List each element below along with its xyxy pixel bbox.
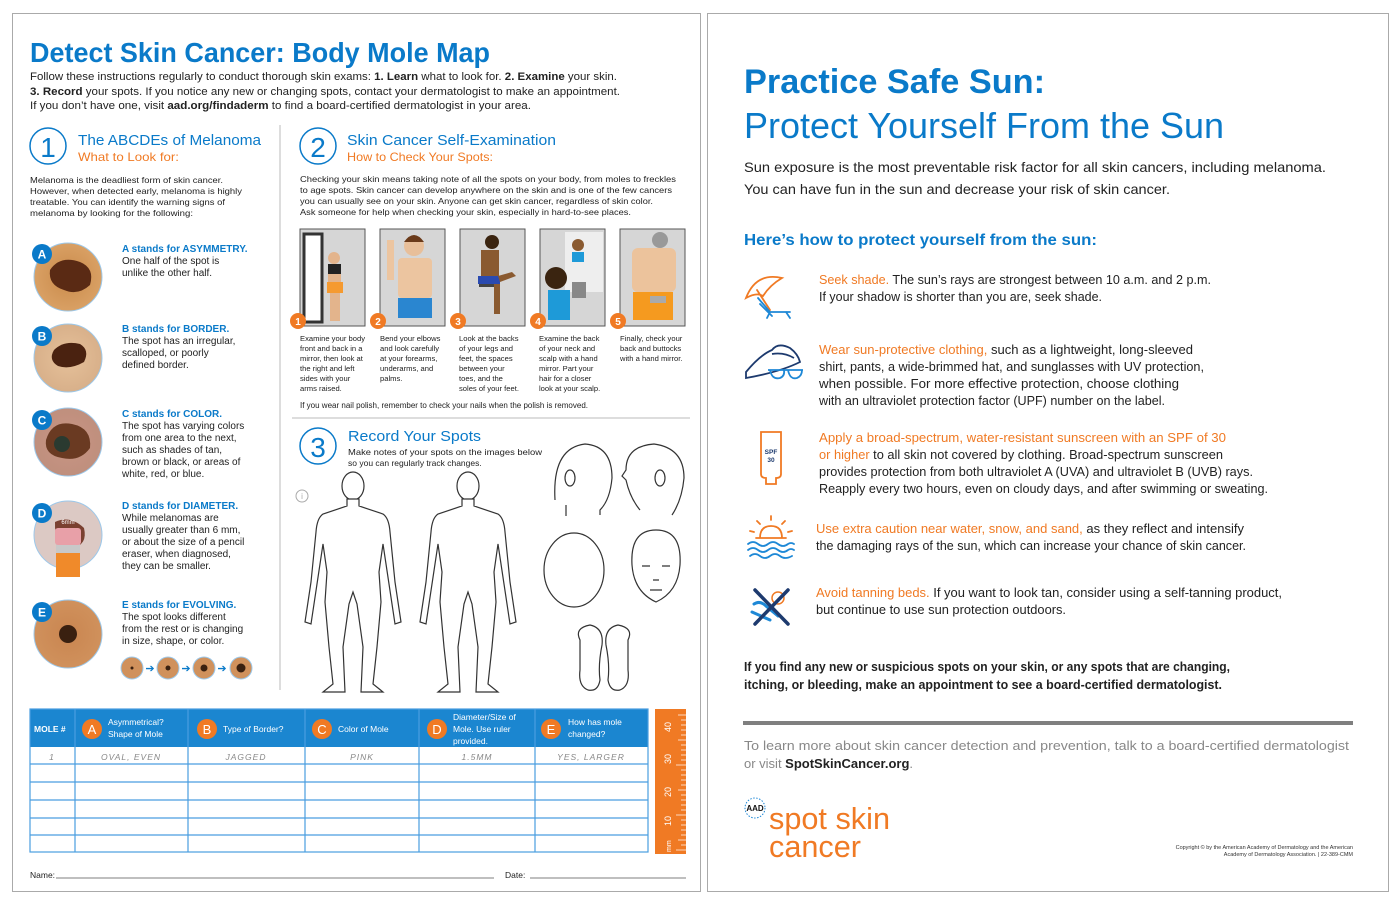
right intro: You can have fun in the sun and decrease your risk of skin cancer. [744,181,1170,197]
tip: clothing: shirt, pants, a wide-brimmed hat, and sunglasses with UV protection, [819,360,1204,374]
tip: clothing: with an ultraviolet protection factor (UPF) number on the label. [818,394,1165,408]
text C: white, red, or blue. [121,469,204,480]
learn more text: or visit SpotSkinCancer.org. [744,756,913,771]
right title: Protect Yourself From the Sun [744,105,1224,146]
page border: right [708,14,1388,892]
info icon [296,490,308,502]
text E: E stands for EVOLVING. [122,600,236,611]
logo: AAD spot skin cancer: cancer [769,829,861,864]
table example row: YES, LARGER [557,752,625,762]
table example row: PINK [350,752,374,762]
table header: A [88,722,97,737]
text B: scalloped, or poorly [122,348,209,359]
mole D: 6mm [61,520,75,526]
text C: C stands for COLOR. [122,409,222,420]
ruler [655,709,686,854]
table header: Mole. Use ruler [453,724,511,734]
text E: from the rest or is changing [122,624,243,635]
step captions: arms raised. [300,384,342,393]
step captions: Look at the backs [459,334,519,343]
section 1 heading: 1 [40,132,56,163]
body diagram front [305,472,401,692]
table header: E [547,722,556,737]
tip: tanning beds: Avoid tanning beds. If you want to look tan, consider using a self-tanning product, [816,586,1282,600]
tip: tanning beds: but continue to use sun protection outdoors. [816,603,1066,617]
mole E: E [38,606,46,620]
table example row [49,752,625,762]
table header: C [317,722,327,737]
section 3 heading: Make notes of your spots on the images below [348,447,543,457]
tip: sunscreen: Apply a broad-spectrum, water-resistant sunscreen with an SPF of 30 [819,431,1226,445]
step captions: of your legs and [459,344,513,353]
name and date lines [30,870,686,880]
section 2 heading: 2 [310,132,326,163]
step captions: and look carefully [380,344,439,353]
step 2 photo: 2 [375,317,381,328]
intro text: If you don’t have one, visit aad.org/findaderm to find a board-certified dermatologist in your area. [30,100,531,112]
section 1 heading: What to Look for: [78,150,179,164]
text D: usually greater than 6 mm, [122,525,240,536]
mole A [32,243,102,311]
text A [122,244,248,279]
ruler: mm [666,840,673,852]
copyright: Copyright © by the American Academy of Dermatology and the American [1176,844,1353,851]
table example row: 1 [49,752,55,762]
step captions: look at your scalp. [539,384,600,393]
step captions: of your neck and [539,344,595,353]
mole tracking table [30,709,648,852]
tip: clothing: Wear sun-protective clothing, such as a lightweight, long-sleeved [819,343,1193,357]
head diagrams [544,444,684,607]
table header: Color of Mole [338,724,389,734]
feet diagram [578,625,630,690]
mole E [32,600,102,668]
step captions: feet, the spaces [459,354,513,363]
tip: sunscreen: or higher to all skin not covered by clothing. Broad-spectrum sunscreen [819,448,1223,462]
table header: provided. [453,736,488,746]
evolving sequence: ➔ [181,663,191,675]
ruler: 20 [663,787,673,797]
tip: seek shade: Seek shade. The sun’s rays are strongest between 10 a.m. and 2 p.m. [819,273,1211,287]
tip: seek shade: If your shadow is shorter than you are, seek shade. [819,290,1102,304]
step 4 photo [530,229,605,329]
step captions: soles of your feet. [459,384,519,393]
section 3 heading: 3 [310,432,326,463]
text D: eraser, when diagnosed, [122,549,231,560]
text B: defined border. [122,360,189,371]
step captions: hair for a closer [539,374,592,383]
icon: hat and sunglasses [746,345,803,378]
right intro: Sun exposure is the most preventable risk factor for all skin cancers, including melanoma. [744,159,1326,175]
step captions: mirror, then look at [300,354,364,363]
step captions: back and buttocks [620,344,681,353]
icon: no tanning beds [752,590,788,624]
nail polish note: If you wear nail polish, remember to check your nails when the polish is removed. [300,401,588,410]
text A: unlike the other half. [122,268,212,279]
tip: sunscreen [819,431,1268,496]
text D: While melanomas are [122,513,219,524]
tip: clothing [818,343,1204,408]
text D: D stands for DIAMETER. [122,501,238,512]
text E: The spot looks different [122,612,226,623]
logo: AAD spot skin cancer [745,798,890,864]
step 3 photo: 3 [455,317,461,328]
section 3 heading: so you can regularly track changes. [348,458,482,468]
learn more text: To learn more about skin cancer detection and prevention, talk to a board-certified dermatologist [744,738,1349,753]
section 1 intro: However, when detected early, melanoma is highly [30,186,243,196]
icon: umbrella and chair [746,277,790,318]
section 1 intro: Melanoma is the deadliest form of skin cancer. [30,175,223,185]
table example row: OVAL, EVEN [101,752,161,762]
table header: Type of Border? [223,724,284,734]
text C: from one area to the next, [122,433,237,444]
step captions: at your forearms, [380,354,437,363]
step captions: sides with your [300,374,351,383]
info icon: i [301,492,303,501]
mole A: A [38,248,47,262]
intro text [30,71,620,112]
right intro [744,159,1326,197]
text B [122,324,235,371]
text B: B stands for BORDER. [122,324,229,335]
text E [122,600,243,647]
step captions: Examine the back [539,334,600,343]
ruler: 30 [663,754,673,764]
table header: MOLE # [34,724,66,734]
section 3 heading: Record Your Spots [348,428,481,445]
mole C: C [38,414,47,428]
section 3 heading [300,428,543,468]
copyright [1176,844,1353,858]
text D: they can be smaller. [122,561,211,572]
mole D: D [38,506,47,520]
logo: AAD spot skin cancer: AAD [746,804,764,813]
icon: sunscreen: 30 [767,457,775,464]
mole B [32,324,102,392]
section 1 heading [30,128,262,164]
table header [34,712,622,746]
table header: D [432,722,442,737]
callout: see a dermatologist [744,660,1230,692]
step captions: mirror. Part your [539,364,594,373]
step captions: the right and left [300,364,355,373]
section 2: self-examination [290,128,685,410]
page border: left [12,14,700,892]
text E: in size, shape, or color. [122,636,224,647]
text C [121,409,244,480]
section 1 intro: treatable. You can identify the warning signs of [30,197,226,207]
section 2 intro: to age spots. Skin cancer can develop anywhere on the skin and is one of the few cancers [300,185,672,195]
step captions: Examine your body [300,334,365,343]
section 1 intro: melanoma by looking for the following: [30,208,193,218]
section 1 intro [30,175,243,218]
table header: How has mole [568,717,622,727]
step captions: with a hand mirror. [619,354,682,363]
tip: sunscreen: provides protection from both ultraviolet A (UVA) and ultraviolet B (UVB) rays. [819,465,1253,479]
step captions: between your [459,364,505,373]
callout: see a dermatologist: If you find any new or suspicious spots on your skin, or any spots that are changing, [744,660,1230,674]
title: Detect Skin Cancer: Detect Skin Cancer: Body Mole Map [30,37,490,68]
section 2 heading: How to Check Your Spots: [347,150,493,164]
right title: Practice Safe Sun: [744,63,1045,101]
intro text: 3. Record your spots. If you notice any new or changing spots, contact your dermatologist to make an appointment. [30,86,620,98]
section 1: ABCDEs [30,128,262,679]
text B: The spot has an irregular, [122,336,235,347]
text D [122,501,244,572]
tip: water snow sand: Use extra caution near water, snow, and sand, as they reflect and intensify [816,522,1245,536]
subheading: how to protect: Here’s how to protect yourself from the sun: [744,232,1097,249]
ruler: 10 [663,816,673,826]
tip: clothing: when possible. For more effective protection, choose clothing [818,377,1179,391]
step captions: Bend your elbows [380,334,441,343]
table example row: 1.5MM [462,752,492,762]
step 2 photo [370,229,445,329]
step 5 photo [610,229,685,329]
table header: Diameter/Size of [453,712,516,722]
learn more text [744,738,1349,771]
text D: or about the size of a pencil [122,537,244,548]
section 2 intro: Ask someone for help when checking your skin, especially in hard-to-see places. [300,207,631,217]
section 2 intro: Checking your skin means taking note of all the spots on your body, from moles to freckles [300,174,676,184]
mole D [32,501,102,577]
text C: The spot has varying colors [122,421,244,432]
mole C [32,408,102,476]
section 2 intro: you can usually see on your skin. Anyone can get skin cancer, regardless of skin color. [300,196,653,206]
tip: sunscreen: Reapply every two hours, even on cloudy days, and after swimming or sweating. [819,482,1268,496]
step 3 photo [450,229,525,329]
section 2 intro [300,174,676,217]
text A: One half of the spot is [122,256,219,267]
table header: Asymmetrical? [108,717,164,727]
intro text: Follow these instructions regularly to conduct thorough skin exams: 1. Learn what to look for. 2. Examine your skin. [30,71,617,83]
step captions: front and back in a [300,344,363,353]
icon: sun over water [748,516,794,558]
step 5 photo: 5 [615,317,621,328]
step captions: toes, and the [459,374,503,383]
tip: tanning beds [816,586,1282,617]
icon: sunscreen [761,432,781,484]
step captions: scalp with a hand [539,354,598,363]
step 1 photo: 1 [295,317,301,328]
step captions: palms. [380,374,402,383]
logo: AAD spot skin cancer: spot skin [769,801,890,836]
evolving sequence: ➔ [217,663,227,675]
text C: such as shades of tan, [122,445,222,456]
table header: B [203,722,211,737]
callout: see a dermatologist: itching, or bleeding, make an appointment to see a board-certified dermatologist. [744,678,1222,692]
tip: water snow sand: the damaging rays of the sun, which can increase your chance of skin cancer. [816,539,1246,553]
section 2 heading: Skin Cancer Self-Examination [347,132,556,149]
table header: Shape of Mole [108,729,163,739]
ruler: 40 [663,722,673,732]
table example row: JAGGED [225,752,266,762]
icon: sunscreen: SPF [765,449,777,456]
table header: changed? [568,729,606,739]
step 4 photo: 4 [535,317,541,328]
section 2 heading [300,128,556,164]
name and date lines: Name: [30,870,55,880]
step 1 photo [290,229,365,329]
step captions: Finally, check your [620,334,683,343]
tip: water snow sand [816,522,1246,553]
mole B: B [38,330,47,344]
copyright: Academy of Dermatology Association. | 22-389-CMM [1224,852,1353,858]
name and date lines: Date: [505,870,525,880]
evolving sequence: ➔ [145,663,155,675]
tip: seek shade [819,273,1211,304]
text A: A stands for ASYMMETRY. [122,244,248,255]
section 3: record your spots [296,428,684,692]
text C: brown or black, or areas of [122,457,241,468]
body diagram back [420,472,516,692]
section 1 heading: The ABCDEs of Melanoma [78,132,262,149]
evolving sequence [121,657,252,679]
step captions [300,334,683,393]
step captions: underarms, and [380,364,433,373]
right title [744,63,1224,146]
